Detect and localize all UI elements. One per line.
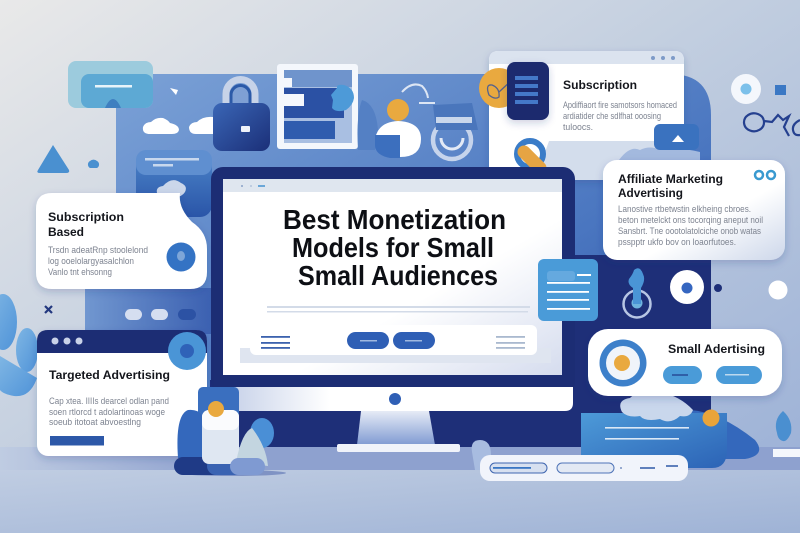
icon: navy dot bbox=[714, 284, 722, 292]
body text: Apdiffiaort fire samotsors homaced bbox=[563, 100, 677, 111]
icon: orange badge bbox=[479, 68, 519, 108]
title bbox=[283, 204, 506, 291]
clouds bbox=[619, 148, 700, 162]
panel: blue card with cloud bbox=[136, 150, 212, 217]
panel: Subscription card bbox=[489, 51, 700, 180]
floor bbox=[0, 447, 800, 533]
icon: blue square bbox=[775, 85, 786, 95]
icon: padlock bbox=[213, 80, 270, 151]
body text: ardiatider che sdlfhat ooosing bbox=[563, 111, 661, 122]
panel: Subscription Based card bbox=[36, 193, 207, 289]
icon: ring and orange pill bbox=[517, 141, 543, 168]
body text bbox=[48, 245, 148, 278]
panel: large blue backdrop bbox=[116, 74, 711, 447]
heading line 2: Based bbox=[48, 227, 84, 239]
icon: paper plane bbox=[170, 88, 178, 95]
stand bbox=[357, 411, 435, 445]
icon: target bbox=[600, 340, 646, 386]
body text: soeub itotoat abvoestlng bbox=[49, 417, 141, 428]
screen header bar bbox=[223, 179, 562, 192]
heading: Subscription bbox=[48, 212, 124, 224]
title: Models for Small bbox=[292, 232, 494, 263]
icon: white dot bbox=[768, 280, 788, 300]
icon: blue document tile bbox=[538, 259, 598, 321]
rings bbox=[755, 171, 775, 179]
icon: close mark bbox=[45, 306, 52, 313]
icon: teal card top left bbox=[68, 61, 153, 108]
title: Small Audiences bbox=[298, 260, 498, 291]
title: Best Monetization bbox=[283, 204, 506, 235]
lower grey area bbox=[535, 141, 684, 180]
blue tile with triangle bbox=[654, 124, 699, 150]
icon: left blobs bbox=[0, 294, 38, 396]
tray bbox=[240, 348, 551, 363]
icon: light ring bbox=[731, 74, 761, 104]
icon: squiggle bbox=[744, 113, 800, 136]
icon: small cloud bbox=[88, 160, 99, 168]
icon: blue circle bbox=[166, 242, 196, 272]
body text: tuloocs. bbox=[563, 122, 593, 133]
icon: image panel bbox=[277, 64, 358, 149]
icon: triangle bbox=[37, 145, 69, 173]
screen bbox=[223, 179, 562, 375]
screen toolbar bbox=[250, 325, 537, 355]
heading: Affiliate Marketing bbox=[618, 174, 723, 186]
monitor bbox=[211, 167, 575, 452]
body text: Trsdn adeatRnp stoolelond bbox=[48, 245, 148, 256]
heading: Targeted Advertising bbox=[49, 370, 170, 382]
icon: folder gear bbox=[433, 103, 478, 159]
icon: drop bbox=[776, 411, 791, 441]
bezel bbox=[211, 167, 575, 393]
body text bbox=[563, 100, 677, 133]
pills bbox=[663, 366, 762, 384]
body text: psspptr ukfo bov on loaorfutoes. bbox=[618, 237, 736, 248]
stand base bbox=[337, 444, 460, 452]
illustration: figure with blobs bbox=[174, 387, 286, 476]
navy right backdrop bbox=[575, 255, 711, 447]
body text bbox=[618, 204, 763, 248]
heading line 2: Advertising bbox=[618, 188, 683, 200]
panel: Targeted Advertising card bbox=[37, 330, 207, 456]
icon: clouds bbox=[143, 117, 213, 134]
power dot bbox=[389, 393, 401, 405]
placeholder lines bbox=[267, 306, 530, 312]
panel: Affiliate Marketing card bbox=[603, 160, 785, 260]
button bbox=[50, 436, 104, 446]
icon: white target bbox=[670, 270, 704, 304]
left lower panel with pills bbox=[85, 288, 215, 334]
heading: Subscription bbox=[563, 80, 637, 92]
icon: keyhole target bbox=[624, 268, 650, 318]
window dots bbox=[52, 338, 82, 344]
body text: Lanostive rtbetwstin elkheing cbroes. bbox=[618, 204, 751, 215]
body text: beton metelckt ons tocorqing aneput noil bbox=[618, 215, 763, 226]
bottom control bar bbox=[472, 440, 688, 481]
body text: Cap xtea. IIIIs dearcel odlan pand bbox=[49, 396, 169, 407]
header dots bbox=[651, 56, 675, 60]
body text: Sansbrt. Tne oootolatolciche onob watas bbox=[618, 226, 761, 237]
body text: soen rtlorcd t adolartinoas woge bbox=[49, 407, 165, 418]
icon: person bbox=[358, 84, 435, 158]
heading: Small Adertising bbox=[668, 344, 765, 356]
navy lower backdrop bbox=[210, 380, 580, 447]
icon: circle badge bbox=[168, 332, 206, 370]
icon: navy document bbox=[507, 62, 549, 120]
icon: blue box with orange dot bbox=[581, 391, 759, 468]
chin bbox=[225, 387, 573, 411]
body text bbox=[49, 396, 169, 428]
panel: Small Advertising card bbox=[588, 329, 782, 396]
body text: Vanlo tnt ehsonng bbox=[48, 267, 112, 278]
body text: log ooelolargyasalchlon bbox=[48, 256, 134, 267]
icon: white bar bbox=[773, 449, 800, 457]
